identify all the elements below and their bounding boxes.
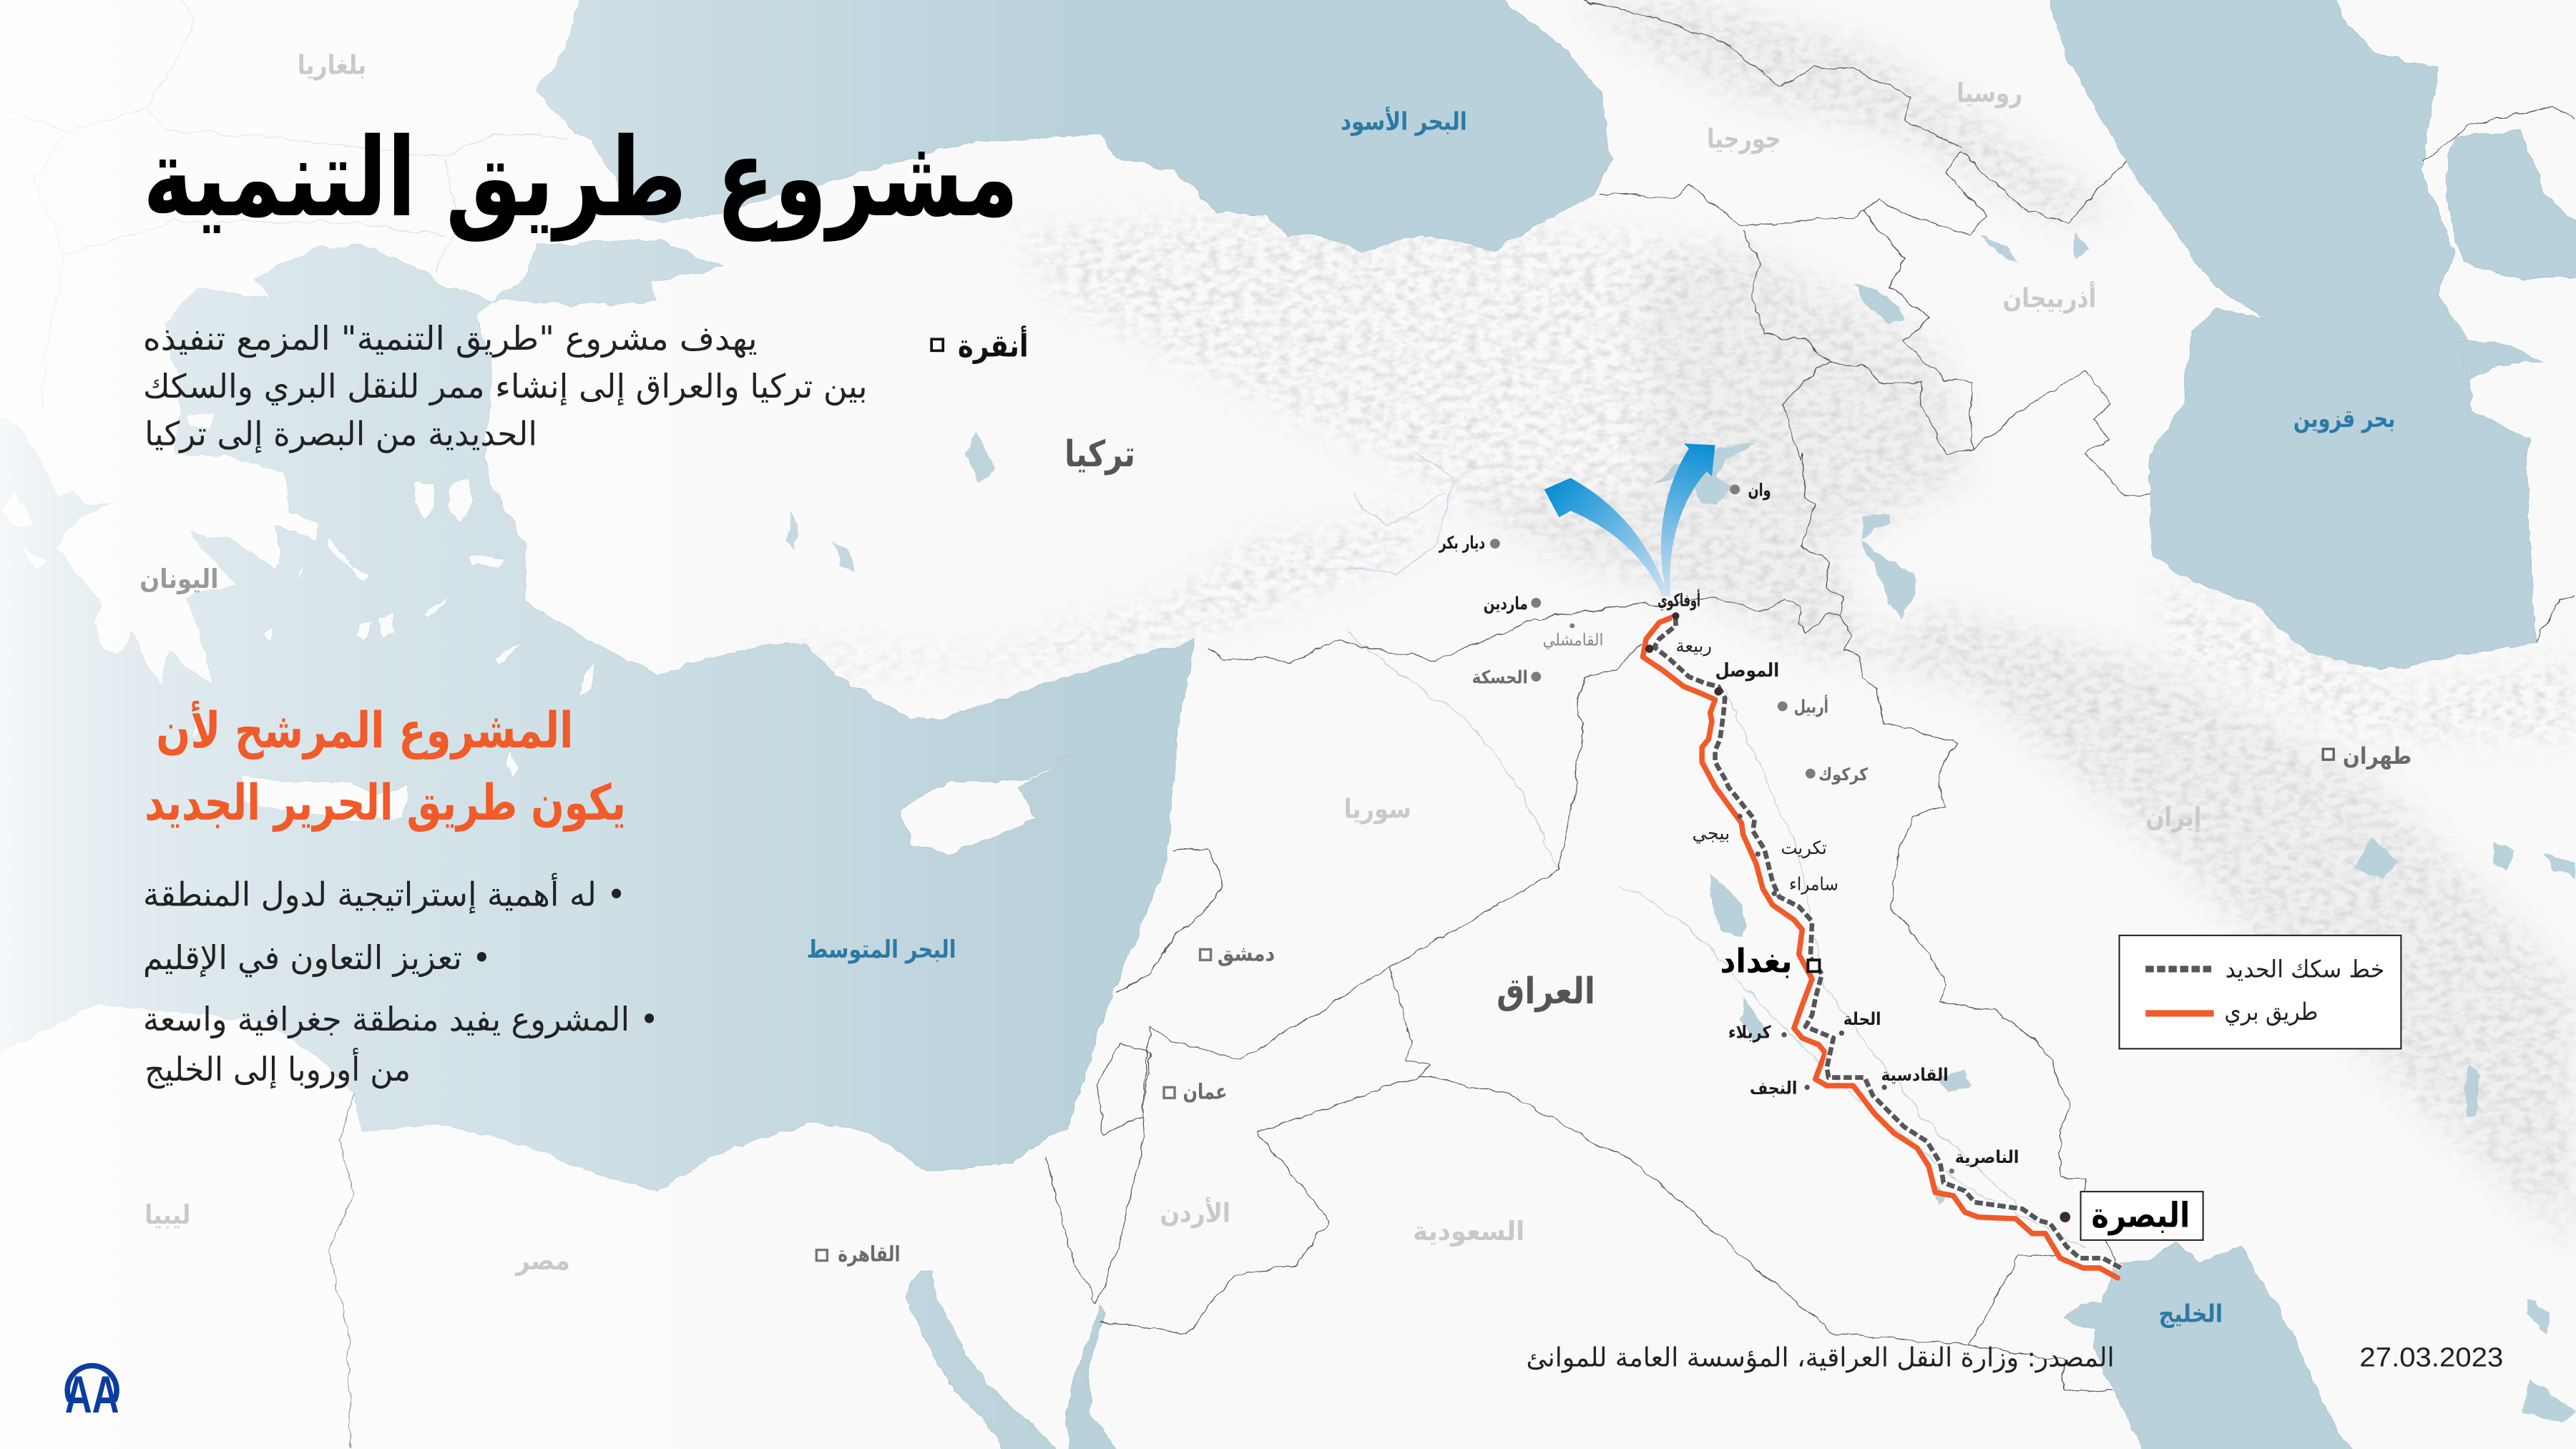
city labels north: كركوك xyxy=(1818,765,1869,785)
country labels: بلغاريا xyxy=(298,49,366,80)
capital labels: Tehran, Damascus, Amman, Cairo xyxy=(816,742,2411,1267)
legend: road sample xyxy=(2145,1012,2214,1015)
country labels: السعودية xyxy=(1413,1216,1524,1247)
sea labels: بحر قزوين xyxy=(2293,405,2395,433)
country labels: إيران xyxy=(2145,802,2201,832)
date: 27.03.2023 xyxy=(2359,1343,2503,1373)
city labels north: الحسكة xyxy=(1472,667,1528,687)
legend xyxy=(2120,935,2401,1048)
country labels: اليونان xyxy=(139,564,218,594)
sea labels: الخليج xyxy=(2159,1300,2223,1329)
capital labels: Tehran, Damascus, Amman, Cairo: دمشق xyxy=(1218,941,1275,966)
city labels north: وان xyxy=(1748,481,1771,501)
sea labels: البحر الأسود xyxy=(1341,106,1467,136)
country labels: روسيا xyxy=(1957,77,2022,108)
country labels: العراق xyxy=(1497,970,1595,1013)
map: left white fade xyxy=(0,0,1084,1449)
label: Ankara xyxy=(931,325,1029,364)
island: Cyprus xyxy=(898,754,1071,855)
bullet list: من أوروبا إلى الخليج xyxy=(145,1048,411,1089)
intro paragraph: الحديدية من البصرة إلى تركيا xyxy=(145,414,537,453)
intro paragraph xyxy=(143,319,868,453)
country labels: ليبيا xyxy=(145,1199,190,1230)
city labels south xyxy=(1692,823,2019,1167)
label: Ankara: أنقرة xyxy=(958,325,1029,364)
legend: خط سكك الحديد xyxy=(2225,955,2384,983)
title: مشروع طريق التنمية xyxy=(143,114,1019,242)
country labels: مصر xyxy=(514,1245,570,1276)
intro paragraph: يهدف مشروع "طريق التنمية" المزمع تنفيذه xyxy=(143,319,758,358)
sea: Gulf of Suez xyxy=(903,1269,1068,1449)
country labels: سوريا xyxy=(1344,794,1411,825)
legend: طريق بري xyxy=(2225,998,2318,1026)
intro paragraph: بين تركيا والعراق إلى إنشاء ممر للنقل البري والسكك xyxy=(143,367,868,406)
legend: railway sample xyxy=(2145,968,2214,971)
bullet list: • تعزيز التعاون في الإقليم xyxy=(143,938,491,978)
sea: Marmara xyxy=(493,240,723,305)
source note: المصدر: وزارة النقل العراقية، المؤسسة العامة للموانئ xyxy=(1526,1342,2115,1373)
country labels: تركيا xyxy=(1064,433,1135,476)
country labels: الأردن xyxy=(1160,1197,1230,1229)
city labels north: أربيل xyxy=(1794,695,1828,717)
orange heading xyxy=(145,701,626,832)
city labels north: ربيعة xyxy=(1675,636,1712,657)
sea: Aegean and Mediterranean xyxy=(0,245,1195,1191)
city labels north: ماردين xyxy=(1484,594,1528,614)
map: mountain relief shading xyxy=(657,0,2576,1248)
sea: Kara-Bogaz xyxy=(2447,129,2576,277)
sea labels: البحر المتوسط xyxy=(807,935,956,964)
sea labels xyxy=(807,106,2395,1329)
sea: Caspian xyxy=(2044,0,2537,670)
logo: AA: AA xyxy=(65,1365,119,1424)
city labels north: القامشلي xyxy=(1542,632,1603,650)
arrow: north-east to Van xyxy=(1661,443,1715,596)
capital labels: Tehran, Damascus, Amman, Cairo: طهران xyxy=(2343,742,2411,770)
city labels north xyxy=(1439,481,1869,785)
city labels north: أوفاكوي xyxy=(1657,588,1700,610)
route: railway (dashed grey) xyxy=(1655,617,2121,1268)
orange heading: يكون طريق الحرير الجديد xyxy=(145,775,626,832)
orange heading: المشروع المرشح لأن xyxy=(156,701,574,760)
sea: Persian Gulf xyxy=(2063,1242,2359,1449)
sea: Black Sea xyxy=(537,0,1612,251)
label: Basra xyxy=(2060,1192,2203,1240)
sea: Gulf of Aqaba xyxy=(1064,1304,1124,1449)
city labels north: ديار بكر xyxy=(1439,533,1485,553)
city labels south: بيجي xyxy=(1692,823,1730,844)
map: Balkan borders xyxy=(0,0,567,411)
bullet list xyxy=(143,873,659,1089)
route stops xyxy=(1645,612,1954,1174)
arrow: north-west to Diyarbakir xyxy=(1544,478,1669,596)
bullet list: • المشروع يفيد منطقة جغرافية واسعة xyxy=(143,1000,659,1039)
city labels south: الحلة xyxy=(1843,1009,1881,1029)
city labels south: تكريت xyxy=(1781,838,1827,859)
capital labels: Tehran, Damascus, Amman, Cairo: عمان xyxy=(1183,1079,1228,1104)
city labels south: النجف xyxy=(1750,1078,1797,1098)
country labels: أذربيجان xyxy=(2002,280,2096,313)
country labels xyxy=(139,49,2201,1276)
label: Baghdad: بغداد xyxy=(1720,942,1793,981)
route: land road (orange) xyxy=(1643,616,2117,1278)
city labels south: الناصرية xyxy=(1955,1147,2019,1167)
capital labels: Tehran, Damascus, Amman, Cairo: القاهرة xyxy=(838,1242,901,1267)
city labels south: كربلاء xyxy=(1728,1022,1772,1042)
country labels: جورجيا xyxy=(1707,124,1781,154)
map: lakes and rivers xyxy=(788,233,2576,1423)
map: islands xyxy=(0,412,1071,855)
label: Basra: البصرة xyxy=(2092,1196,2190,1236)
bullet list: • له أهمية إستراتيجية لدول المنطقة xyxy=(143,873,626,915)
city labels north: الموصل xyxy=(1715,659,1779,682)
city labels south: سامراء xyxy=(1789,874,1838,895)
city labels south: القادسية xyxy=(1881,1065,1949,1085)
